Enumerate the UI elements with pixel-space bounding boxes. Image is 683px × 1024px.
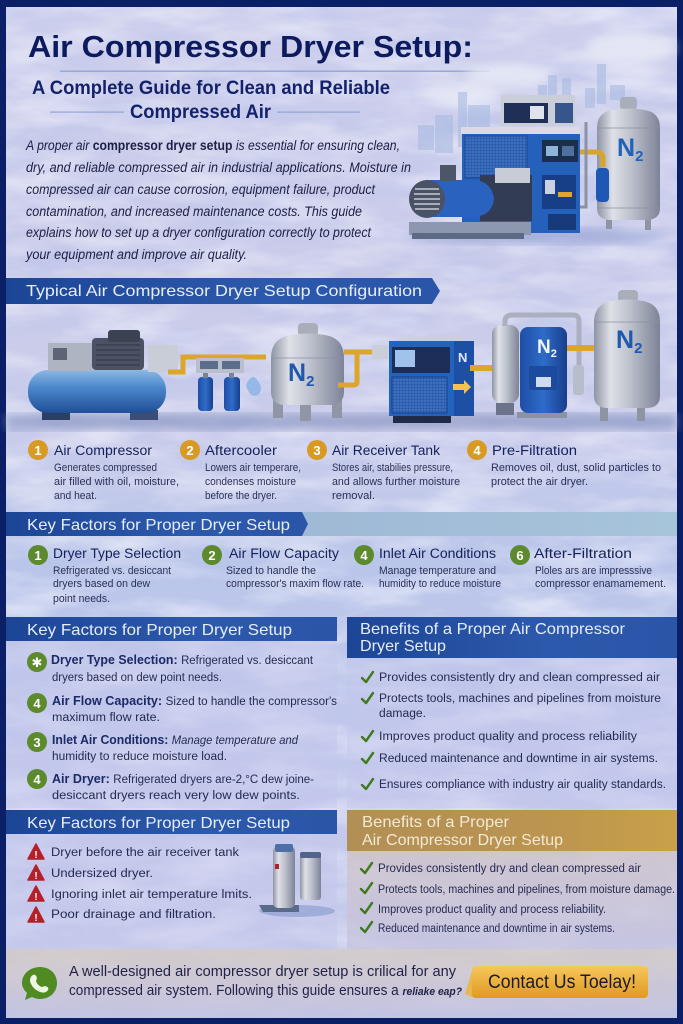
item: inlet air: humidity to reduce moisture load. [52, 751, 227, 763]
factor 2: air flow capacity: compressor's maxim flow rate. [226, 578, 364, 590]
right N2 tank: 2 [634, 340, 642, 357]
step 1: air compressor [28, 440, 179, 502]
pipes [580, 152, 603, 167]
mistake 2 [28, 865, 153, 882]
motor on skid [409, 165, 532, 239]
intro paragraph: dry, and reliable compressed air in industrial applications. Moisture in [26, 160, 411, 175]
step 2: aftercooler: 2 [186, 443, 194, 458]
item: inlet air [27, 732, 299, 763]
icon: phone chat bubble [22, 967, 57, 1000]
step 2: aftercooler: condenses moisture [205, 476, 296, 488]
step 1: air compressor: air filled with oil, moisture, [54, 476, 179, 488]
mistake 4: Poor drainage and filtration. [51, 909, 216, 921]
section ribbon: typical setup: Typical Air Compressor Dryer Setup Configuration [26, 283, 422, 300]
horizontal air compressor and receiver [28, 330, 178, 420]
mistake 1: Dryer before the air receiver tank [51, 847, 239, 859]
factor 6: after-filtration: Ploles ars are impresssive [535, 565, 652, 577]
dryer cabinet [461, 95, 580, 233]
filter pair [196, 358, 244, 411]
item: air dryer: 4 [33, 772, 41, 787]
mistake 4: ! [34, 913, 38, 924]
panel heading: Benefits of a Proper Air Compressor [360, 621, 626, 638]
N2 tank: N [617, 134, 635, 162]
closing text [69, 964, 462, 999]
subtitle [32, 77, 390, 123]
step 3: air receiver tank [307, 440, 460, 502]
item: inlet air: 3 [33, 735, 41, 750]
title block [28, 29, 490, 123]
item: air dryer: desiccant dryers reach very low dew points. [52, 790, 300, 802]
mistake 1: ! [34, 850, 38, 861]
item: dryer type [27, 652, 314, 684]
blue N2 generator [517, 327, 567, 418]
process diagram [6, 290, 677, 430]
factor 2: air flow capacity: Air Flow Capacity [229, 546, 339, 561]
step 1: air compressor: Generates compressed [54, 462, 157, 474]
step 4: pre-filtration: Removes oil, dust, solid particles to [491, 462, 661, 474]
top manifold [505, 315, 579, 371]
right N2 tank: N [616, 326, 634, 354]
intro paragraph: compressed air can cause corrosion, equipment failure, product [26, 182, 376, 197]
closing text: compressed air system. Following this guide ensures a reliake eap? [69, 983, 462, 999]
refrigerated dryer: N [458, 350, 467, 365]
item: dryer type: dryers based on dew point needs. [52, 672, 222, 684]
panel heading [347, 810, 677, 851]
subtitle: Compressed Air [130, 101, 271, 123]
factor 4: inlet air conditions: Manage temperature and [379, 565, 496, 577]
panel heading [347, 617, 677, 658]
item: air dryer [27, 769, 314, 802]
factor 4: inlet air conditions: Inlet Air Conditions [379, 546, 496, 561]
N2 tank [597, 97, 660, 230]
factor 1: dryer type: point needs. [53, 593, 110, 605]
mistake 3 [28, 886, 252, 903]
step 4: pre-filtration [467, 440, 661, 488]
pipes into dryer [338, 352, 380, 385]
step 1: air compressor: and heat. [54, 490, 97, 502]
mistake 1 [28, 844, 239, 861]
ground band [6, 414, 677, 430]
intro paragraph: explains how to set up a dryer configuration correctly to protect [26, 225, 372, 240]
intro paragraph: your equipment and improve air quality. [25, 247, 247, 262]
receiver tank [271, 323, 344, 421]
receiver tank: 2 [306, 373, 314, 390]
item: air flow: Air Flow Capacity: Sized to handle the compressor's [52, 694, 337, 708]
item: dryer type: ✱ [32, 655, 43, 670]
right N2 tank [594, 290, 660, 421]
step 3: air receiver tank: and allows further moisture [332, 476, 460, 488]
mistake 2: Undersized dryer. [51, 868, 153, 880]
panel: benefits list [347, 617, 677, 808]
step 3: air receiver tank: removal. [332, 490, 375, 502]
blue N2 generator: N [537, 337, 551, 358]
factor 1: dryer type: 1 [34, 548, 42, 563]
benefit 4: Reduced maintenance and downtime in air systems. [379, 753, 658, 765]
step 2: aftercooler: before the dryer. [205, 490, 277, 502]
item: air flow: 4 [33, 696, 41, 711]
factor 1: dryer type [28, 545, 181, 605]
hero illustration: compressor, dryer, N2 tank with city backdrop [405, 32, 675, 244]
benefit 5: Ensures compliance with industry air quality standards. [379, 779, 666, 791]
benefit 2: Protects tools, machines and pipelines from moisture [379, 693, 661, 705]
factor 2: air flow capacity: Sized to handle the [226, 565, 316, 577]
mistake 2: ! [34, 871, 38, 882]
factor 4: inlet air conditions [354, 545, 501, 590]
factor 1: dryer type: Refrigerated vs. desiccant [53, 565, 171, 577]
item: inlet air: Inlet Air Conditions: Manage temperature and [52, 733, 299, 747]
factor 4: inlet air conditions: humidity to reduce moisture [379, 578, 501, 590]
panel heading: Key Factors for Proper Dryer Setup [27, 622, 292, 639]
factor 6: after-filtration [510, 545, 666, 590]
panel heading: Air Compressor Dryer Setup [362, 832, 563, 849]
step 4: pre-filtration: Pre-Filtration [492, 443, 577, 458]
section ribbon: key factors: Key Factors for Proper Dryer Setup [27, 517, 290, 534]
section ribbon: typical setup [6, 278, 440, 304]
item: air flow: maximum flow rate. [52, 712, 160, 724]
mistake 3: Ignoring inlet air temperature lmits. [51, 889, 252, 901]
section ribbon: key factors [6, 512, 677, 536]
step 2: aftercooler [180, 440, 301, 502]
panel heading [6, 810, 337, 834]
step 3: air receiver tank: Stores air, stabilies pressure, [332, 462, 453, 474]
button [465, 966, 648, 998]
factor 1: dryer type: Dryer Type Selection [53, 546, 181, 561]
item: air flow [27, 693, 337, 724]
closing text: A well-designed air compressor dryer setup is crilical for any [69, 964, 457, 980]
benefit 4: Reduced maintenance and downtime in air systems. [378, 923, 615, 935]
water splash [246, 377, 261, 396]
benefit 2: damage. [379, 708, 426, 720]
step 1: air compressor: Air Compressor [54, 443, 153, 458]
city and smoke backdrop [418, 32, 675, 153]
panel heading [6, 617, 337, 641]
panel: benefits tan [347, 810, 677, 949]
factor 6: after-filtration: After-Filtration [534, 546, 632, 561]
yellow pipe to filters [168, 357, 266, 372]
step 4: pre-filtration: protect the air dryer. [491, 476, 588, 488]
benefit 1: Provides consistently dry and clean compressed air [378, 863, 641, 875]
factor 1: dryer type: dryers based on dew [53, 578, 150, 590]
step 3: air receiver tank: Air Receiver Tank [332, 443, 440, 458]
icon: dryer vessels [259, 844, 335, 917]
refrigerated dryer [389, 341, 474, 423]
factor 6: after-filtration: compressor enamamement. [535, 578, 666, 590]
benefit 1: Provides consistently dry and clean compressed air [379, 672, 660, 684]
factor 6: after-filtration: 6 [516, 548, 524, 563]
subtitle: A Complete Guide for Clean and Reliable [32, 77, 390, 99]
intro paragraph: A proper air compressor dryer setup is essential for ensuring clean, [25, 138, 400, 153]
item: dryer type: Dryer Type Selection: Refrigerated vs. desiccant [51, 653, 314, 667]
step 2: aftercooler: Aftercooler [205, 443, 278, 458]
inline filter [573, 365, 584, 395]
panel heading: Dryer Setup [360, 638, 446, 655]
footer call to action [6, 949, 677, 1018]
panel: key factors list [6, 617, 337, 808]
intro paragraph: contamination, and increased maintenance costs. This guide [26, 204, 362, 219]
benefit 3: Improves product quality and process reliability [379, 731, 637, 743]
intro paragraph [25, 138, 411, 262]
title: Air Compressor Dryer Setup: [28, 29, 473, 64]
benefit 3: Improves product quality and process reliability. [378, 904, 606, 916]
panel: common mistakes [6, 810, 337, 949]
mistake 3: ! [34, 892, 38, 903]
button: Contact Us Toelay! [488, 972, 636, 993]
step 3: air receiver tank: 3 [313, 443, 321, 458]
step 4: pre-filtration: 4 [473, 443, 481, 458]
factor 4: inlet air conditions: 4 [360, 548, 368, 563]
N2 tank: 2 [635, 148, 643, 165]
ground shadow [405, 228, 665, 244]
step 1: air compressor: 1 [34, 443, 42, 458]
benefit 2 [362, 693, 661, 720]
coalescing vessel [492, 325, 519, 403]
item: air dryer: Air Dryer: Refrigerated dryers are-2,°C dew joine- [52, 772, 314, 786]
mistake 4 [28, 907, 216, 924]
panel heading: Benefits of a Proper [362, 814, 510, 831]
step 2: aftercooler: Lowers air temperare, [205, 462, 301, 474]
panel heading: Key Factors for Proper Dryer Setup [27, 815, 290, 832]
factor 2: air flow capacity [202, 545, 364, 590]
factor 2: air flow capacity: 2 [208, 548, 216, 563]
receiver tank: N [288, 359, 306, 387]
blue N2 generator: 2 [551, 348, 557, 360]
